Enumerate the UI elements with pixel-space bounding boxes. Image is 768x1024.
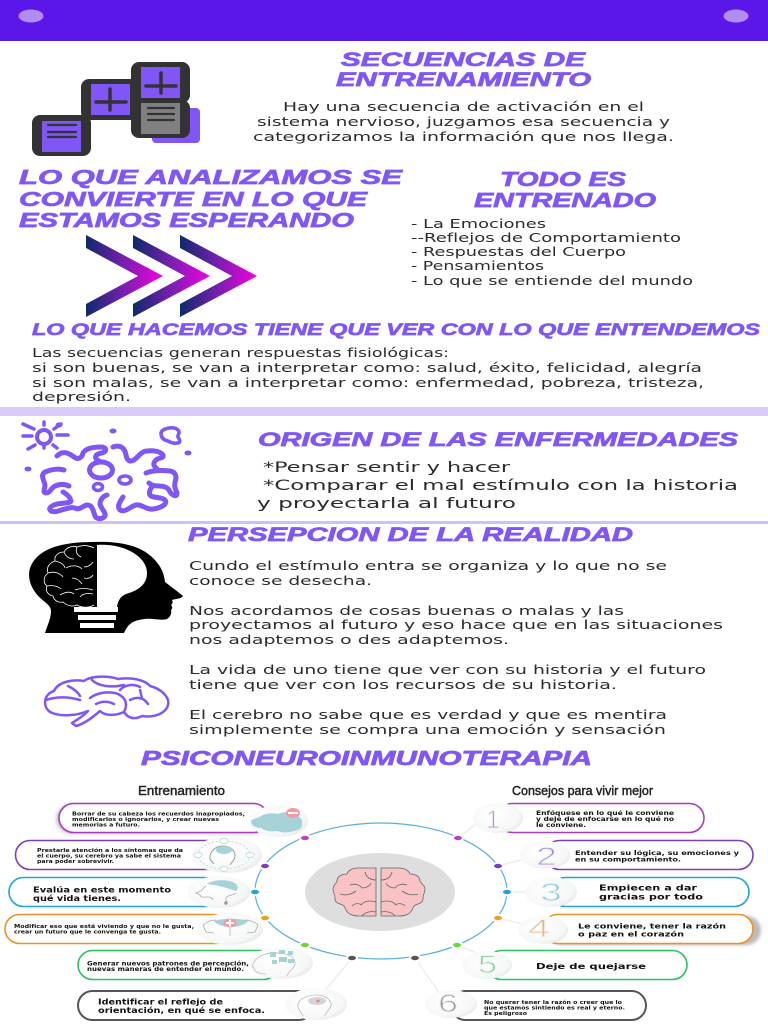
pill: tip 2: 2 <box>536 843 557 871</box>
pill: borrar: modificarlos o ignorarlos, y crear nuevas <box>72 817 220 823</box>
pill: tip 2: en su comportamiento. <box>575 856 681 864</box>
pill: tip 4: 4 <box>528 915 550 943</box>
pill: generar: Generar nuevos patrones de percepción, <box>87 960 249 968</box>
pill: identificar: Identificar el reflejo de <box>98 998 224 1006</box>
text: respuestas fisiologicas: depresión. <box>32 390 131 404</box>
icon: purple brain outline <box>45 677 168 726</box>
text: respuestas fisiologicas <box>32 346 704 404</box>
pill: tip 6 <box>425 990 646 1020</box>
heading: todo es entrenado: ENTRENADO <box>474 190 657 212</box>
pill: tip 6: Es peligroso <box>484 1011 528 1017</box>
text: sistema nervioso <box>253 100 674 144</box>
list: todo es entrenado: - Respuestas del Cuerpo <box>411 245 626 259</box>
pill: generar <box>78 950 278 980</box>
pill: borrar: memorias a futuro. <box>72 822 140 828</box>
heading: lo que hacemos: LO QUE HACEMOS TIENE QUE VER CON LO QUE ENTENDEMOS <box>32 320 761 339</box>
pill: modificar <box>5 914 230 944</box>
pill: borrar <box>56 804 268 834</box>
pill: prestarle atencion <box>16 840 228 870</box>
icon: two heads with cross <box>197 913 263 945</box>
pill: tip 5: 5 <box>478 951 497 979</box>
pill: tip 2 <box>520 840 753 871</box>
pill: tip 5 <box>462 950 687 980</box>
pill: tip 6: No querer tener la razón o creer que lo <box>484 999 623 1006</box>
header bar <box>0 0 768 41</box>
icon: central brain <box>305 853 455 931</box>
heading: lo que analizamos: LO QUE ANALIZAMOS SE <box>19 167 403 189</box>
pill: tip 6: que estamos sintiendo es real y eterno. <box>484 1006 625 1012</box>
list: todo es entrenado: - La Emociones <box>411 217 546 231</box>
heading: todo es entrenado <box>474 169 657 212</box>
pill: tip 1: 1 <box>486 806 500 834</box>
pill: tip 1: le conviene. <box>536 823 586 829</box>
icon: virus cluster <box>23 422 192 519</box>
pill: tip 1 <box>473 803 704 834</box>
text: percepcion de la realidad: Nos acordamos de cosas buenas o malas y las <box>189 604 624 618</box>
text: percepcion de la realidad: La vida de uno tiene que ver con su historia y el futuro <box>189 663 706 677</box>
pill: tip 3: gracias por todo <box>599 892 704 902</box>
icon: triple chevron arrows <box>86 235 257 317</box>
pill: tip 1: y deje de enfocarse en lo qué no <box>536 816 674 823</box>
text: percepcion de la realidad: nos adaptemos o des adaptemos. <box>189 633 509 647</box>
pill: identificar: orientación, en qué se enfoca. <box>98 1005 265 1015</box>
heading: lo que analizamos <box>19 167 403 232</box>
text: pensar sentir y hacer: *Pensar sentir y hacer <box>263 460 510 476</box>
text: percepcion de la realidad: simplemente se compra una emoción y sensación <box>189 723 666 737</box>
title: entrenamiento: Entrenamiento <box>138 783 225 798</box>
pill: tip 3: 3 <box>540 879 562 907</box>
icon: brain with minus <box>250 805 308 837</box>
pill: identificar <box>78 991 313 1020</box>
heading: secuencias de entrenamiento: SECUENCIAS DE <box>341 50 587 71</box>
text: pensar sentir y hacer <box>257 460 738 512</box>
pill: evalua <box>9 878 219 906</box>
heading: persepcion de la realidad: PERSEPCION DE LA REALIDAD <box>188 525 633 546</box>
icon: head with nodes <box>192 837 262 873</box>
heading: origen de las enfermedades: ORIGEN DE LAS ENFERMEDADES <box>258 430 738 451</box>
pill: tip 3 <box>525 877 749 907</box>
pill: tip 5: Deje de quejarse <box>536 962 647 971</box>
text: pensar sentir y hacer: *Comparar el mal estímulo con la historia <box>263 478 738 494</box>
pill: prestarle atencion: el cuerpo, su cerebro ya sabe el sistema <box>37 854 181 860</box>
heading: todo es entrenado: TODO ES <box>500 169 627 191</box>
list: todo es entrenado: - Pensamientos <box>411 259 544 273</box>
pill: tip 6: 6 <box>438 990 458 1018</box>
icon: head with light bulb brain <box>29 542 183 633</box>
text: sistema nervioso: categorizamos la información que nos llega. <box>253 130 674 144</box>
icon: head with target <box>285 988 347 1020</box>
pill: tip 4: o paz en el corazón <box>578 930 684 938</box>
heading: psiconeuroinmunoterapia: PSICONEUROINMUNOTERAPIA <box>141 748 592 770</box>
pill: tip 1: Enfóquese en lo qué le conviene <box>536 810 674 817</box>
heading: lo que analizamos: CONVIERTE EN LO QUE <box>19 189 368 211</box>
pill: prestarle atencion: Prestarle atención a los síntomas que da <box>37 847 183 854</box>
text: percepcion de la realidad: El cerebro no sabe que es verdad y que es mentira <box>189 708 667 722</box>
heading: secuencias de entrenamiento: ENTRENAMIENTO <box>336 70 591 91</box>
pill: tip 2: Entender su lógica, su emociones y <box>575 849 739 857</box>
icon: head profile <box>188 876 250 908</box>
diagram: central ring <box>250 823 528 994</box>
pill: evalua: qué vida tienes. <box>33 893 121 903</box>
text: sistema nervioso: Hay una secuencia de activación en el <box>283 100 644 114</box>
pill: tip 4: Le conviene, tener la razón <box>578 922 726 930</box>
text: respuestas fisiologicas: si son malas, se van a interpretar como: enfermedad, pobreza, tristeza, <box>32 376 704 390</box>
pill: borrar: Borrar de su cabeza los recuerdos inapropiados, <box>72 812 245 818</box>
heading: secuencias de entrenamiento <box>336 50 591 91</box>
text: pensar sentir y hacer: y proyectarla al futuro <box>257 496 516 512</box>
text: respuestas fisiologicas: si son buenas, se van a interpretar como: salud, éxito, felicidad, alegría <box>32 361 702 375</box>
heading: lo que analizamos: ESTAMOS ESPERANDO <box>19 210 355 232</box>
pill: modificar: crear un futuro que le convenga te gusta. <box>14 930 161 936</box>
text: percepcion de la realidad: tiene que ver con los recursos de su historia. <box>189 678 617 692</box>
pill: tip 4 <box>518 914 761 945</box>
text: percepcion de la realidad: proyectamos al futuro y eso hace que en las situaciones <box>189 618 723 632</box>
pill: evalua: Evalúa en este momento <box>33 886 172 894</box>
text: sistema nervioso: sistema nervioso, juzgamos esa secuencia y <box>257 115 670 129</box>
pill: modificar: Modificar eso que está viviendo y que no le gusta, <box>14 923 194 930</box>
pill: tip 3: Empiecen a dar <box>599 884 697 892</box>
icon: head with puzzle <box>249 947 313 979</box>
list: todo es entrenado: --Reflejos de Comportamiento <box>411 231 681 245</box>
pill: prestarle atencion: para poder sobrevivir. <box>37 859 114 865</box>
list: todo es entrenado <box>411 217 693 288</box>
text: percepcion de la realidad <box>189 559 723 737</box>
text: percepcion de la realidad: Cundo el estímulo entra se organiza y lo que no se <box>189 559 667 573</box>
title: consejos: Consejos para vivir mejor <box>512 783 654 798</box>
icon: sequence blocks <box>32 62 200 156</box>
list: todo es entrenado: - Lo que se entiende del mundo <box>411 274 693 288</box>
pill: generar: nuevas maneras de entender el mundo. <box>87 967 244 973</box>
text: respuestas fisiologicas: Las secuencias generan respuestas fisiológicas: <box>32 346 449 360</box>
text: percepcion de la realidad: conoce se desecha. <box>189 574 372 588</box>
